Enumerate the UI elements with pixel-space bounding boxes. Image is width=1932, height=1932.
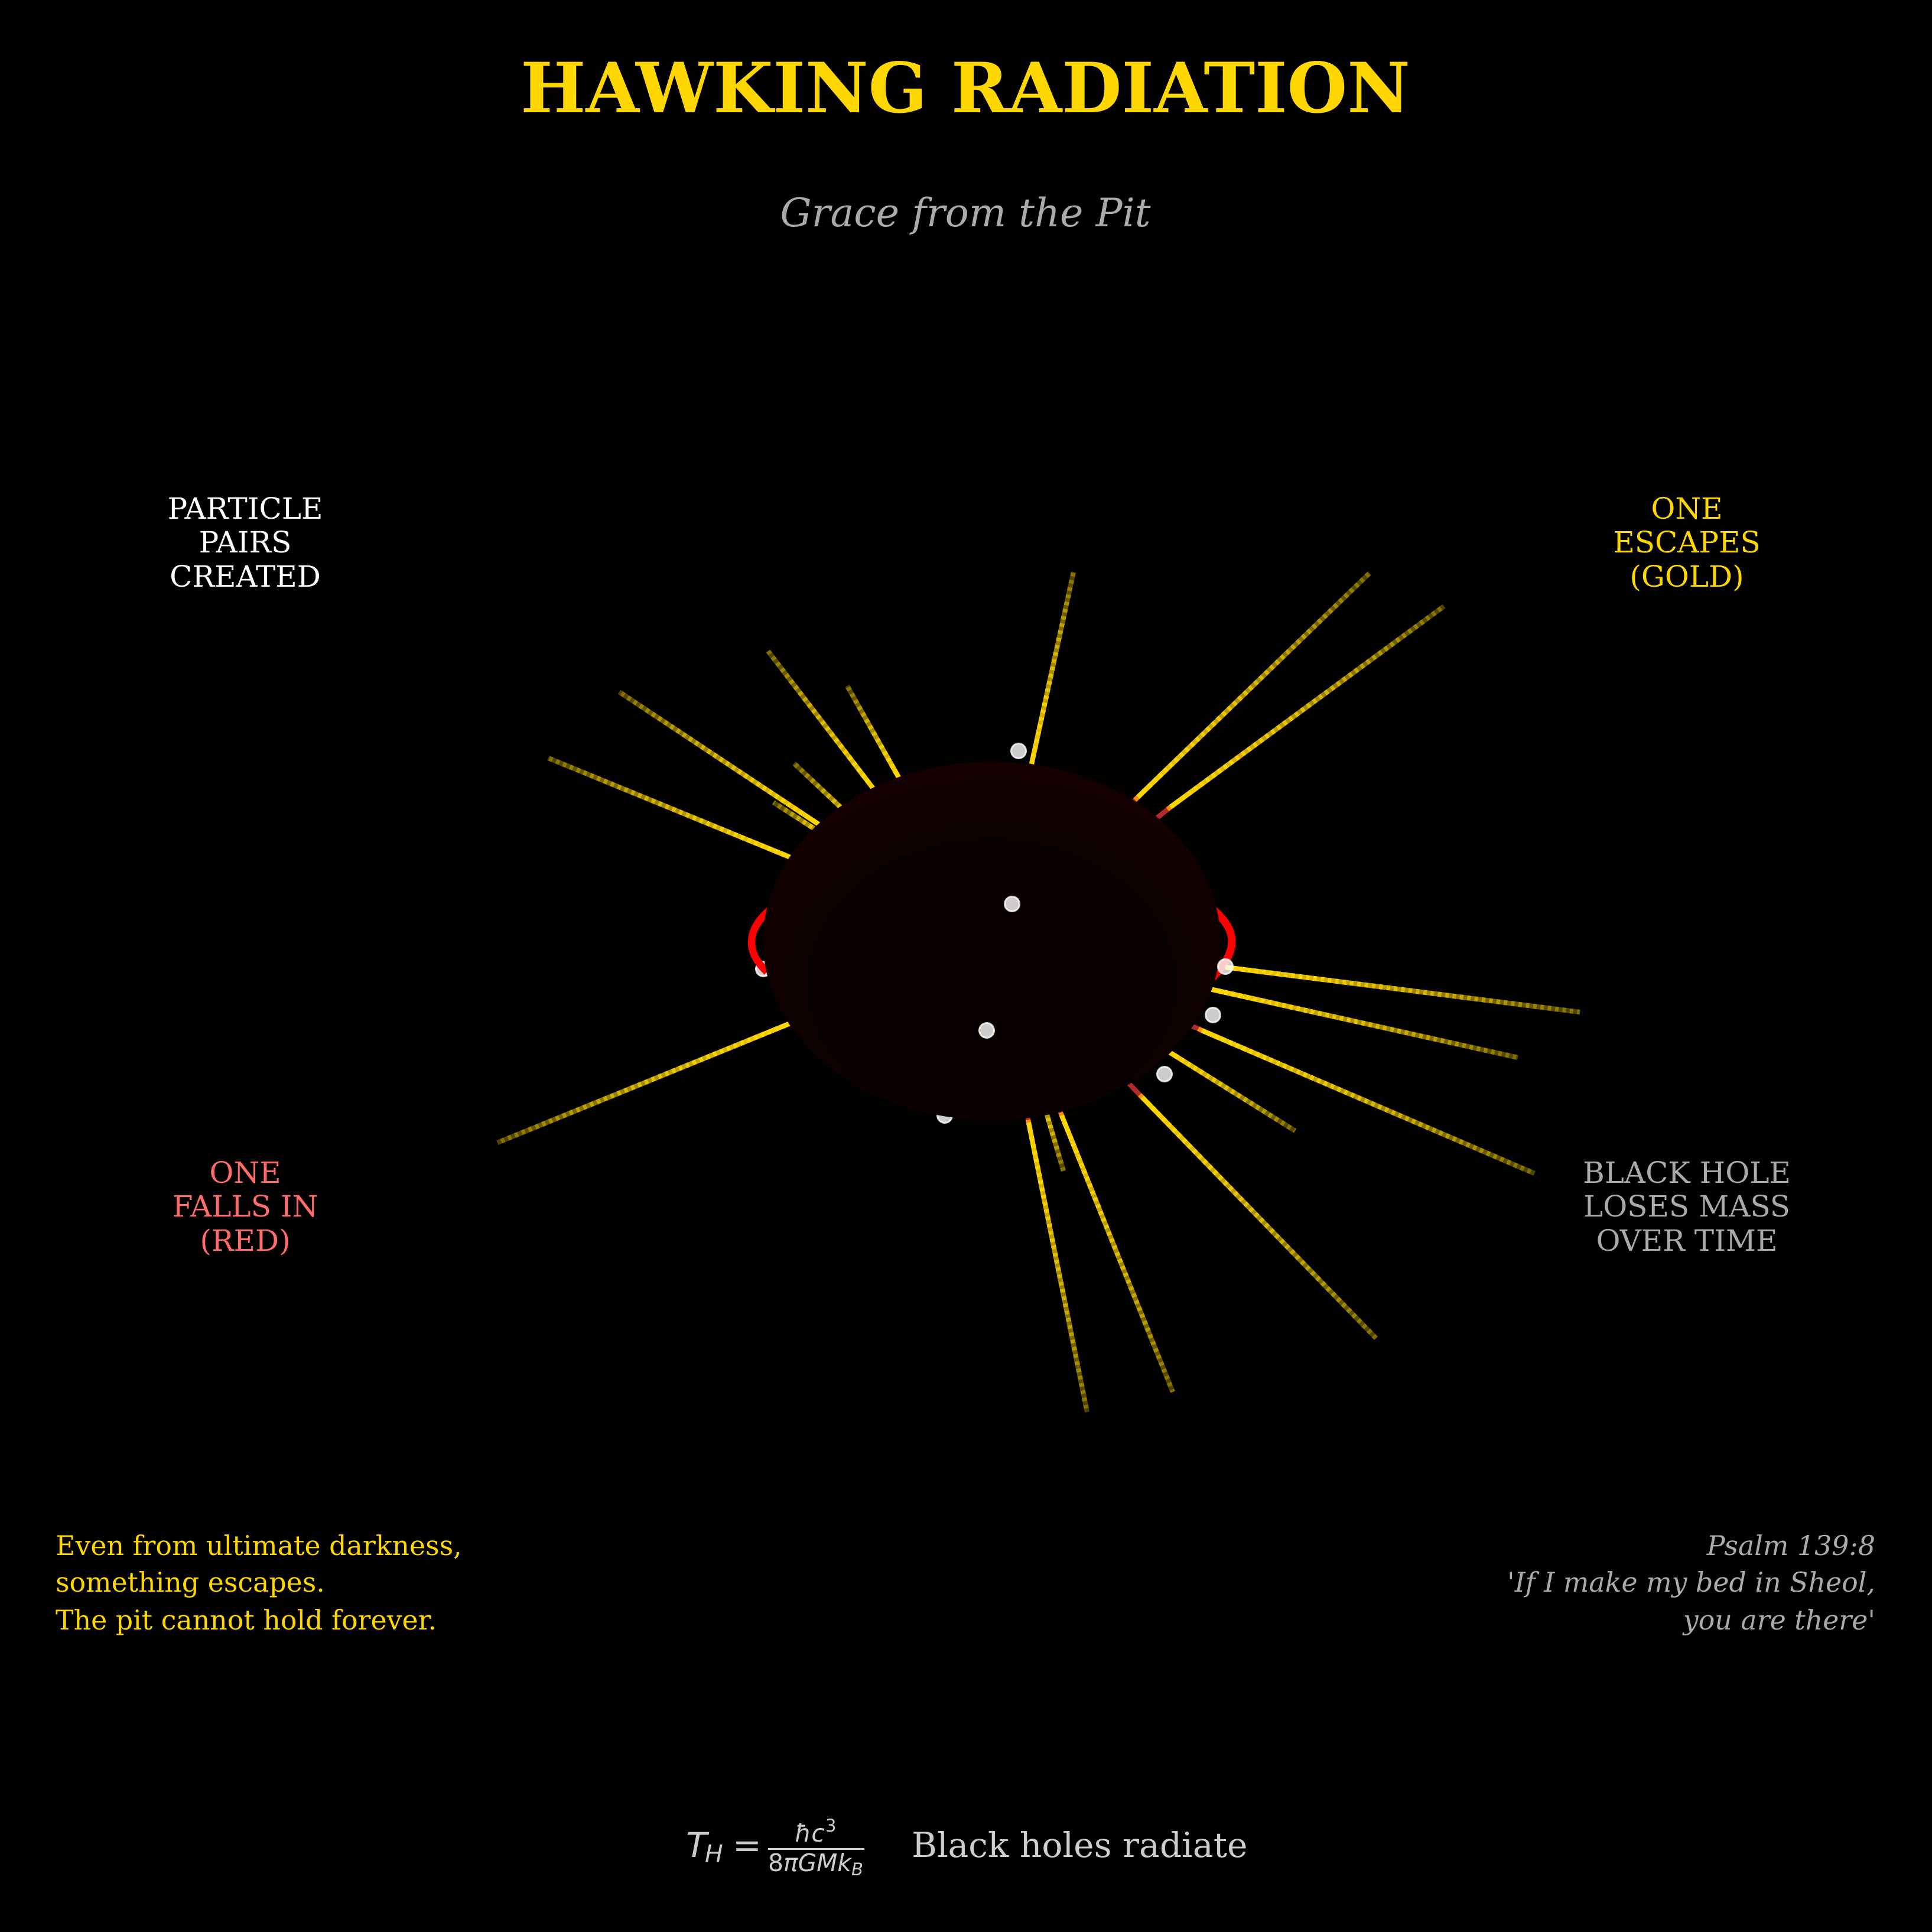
particles partly hidden by the black hole	[756, 962, 952, 1123]
infalling red arc: right	[1211, 908, 1232, 978]
particles in front of the black hole	[980, 743, 1232, 1081]
Hawking temperature formula: 8πGMk	[768, 1849, 852, 1877]
ray 6 with red infalling end	[1191, 1026, 1534, 1173]
label: particle pairs created: PARTICLE	[168, 492, 323, 526]
Hawking temperature formula: B	[851, 1859, 863, 1879]
label: one falls in: FALLS IN	[173, 1189, 318, 1224]
label: one falls in: ONE	[209, 1156, 281, 1190]
ray 10 with red infalling end	[1027, 1115, 1087, 1412]
ray 11	[1046, 1111, 1063, 1171]
label: particle pairs created: PAIRS	[199, 525, 291, 560]
Hawking temperature formula: =	[733, 1825, 762, 1865]
Hawking temperature formula: T	[686, 1825, 710, 1865]
label: one escapes: ESCAPES	[1613, 525, 1761, 560]
ray 2 with red infalling end	[1128, 573, 1370, 806]
escaping gold rays	[497, 572, 1580, 1412]
ray 8 with red infalling end	[1127, 1082, 1376, 1338]
infalling red arc: left	[752, 908, 772, 972]
ray 16	[847, 686, 900, 780]
Hawking temperature formula: H	[705, 1840, 723, 1868]
black hole	[763, 762, 1221, 1120]
label: one escapes: ONE	[1651, 492, 1723, 526]
Hawking temperature formula: 3	[825, 1816, 836, 1836]
Hawking temperature formula: ħc	[795, 1819, 825, 1848]
ray 3 with red infalling end	[1155, 606, 1444, 819]
label: black hole loses mass: LOSES MASS	[1583, 1189, 1790, 1224]
caption: even from ultimate darkness: The pit cannot hold forever.	[56, 1604, 437, 1636]
ray 17	[794, 763, 846, 812]
Hawking temperature formula	[686, 1816, 864, 1879]
caption: even from ultimate darkness: Even from ultimate darkness,	[56, 1530, 462, 1562]
ray 15	[768, 651, 878, 795]
label: black hole loses mass: BLACK HOLE	[1583, 1156, 1791, 1190]
caption: Psalm 139:8: Psalm 139:8	[1706, 1530, 1875, 1562]
subtitle: Grace from the Pit	[780, 190, 1151, 236]
ray 9 with red infalling end	[1059, 1110, 1173, 1392]
caption: Psalm 139:8: 'If I make my bed in Sheol,	[1507, 1566, 1875, 1598]
caption: even from ultimate darkness: something escapes.	[56, 1566, 325, 1598]
ray 7	[1169, 1052, 1295, 1131]
ray 5	[1210, 989, 1518, 1058]
ray 18	[773, 802, 818, 831]
ray 13	[548, 758, 792, 858]
ray 12	[497, 1023, 792, 1143]
ray 4	[1225, 967, 1580, 1012]
ray 1	[1032, 572, 1074, 764]
ray 14	[619, 692, 821, 826]
title: HAWKING RADIATION	[521, 47, 1410, 129]
label: one falls in: (RED)	[200, 1224, 291, 1258]
label: black hole loses mass: OVER TIME	[1596, 1224, 1778, 1258]
caption: Psalm 139:8: you are there'	[1682, 1604, 1875, 1636]
formula caption: Black holes radiate	[912, 1825, 1248, 1865]
label: one escapes: (GOLD)	[1629, 560, 1744, 594]
label: particle pairs created: CREATED	[170, 560, 321, 594]
